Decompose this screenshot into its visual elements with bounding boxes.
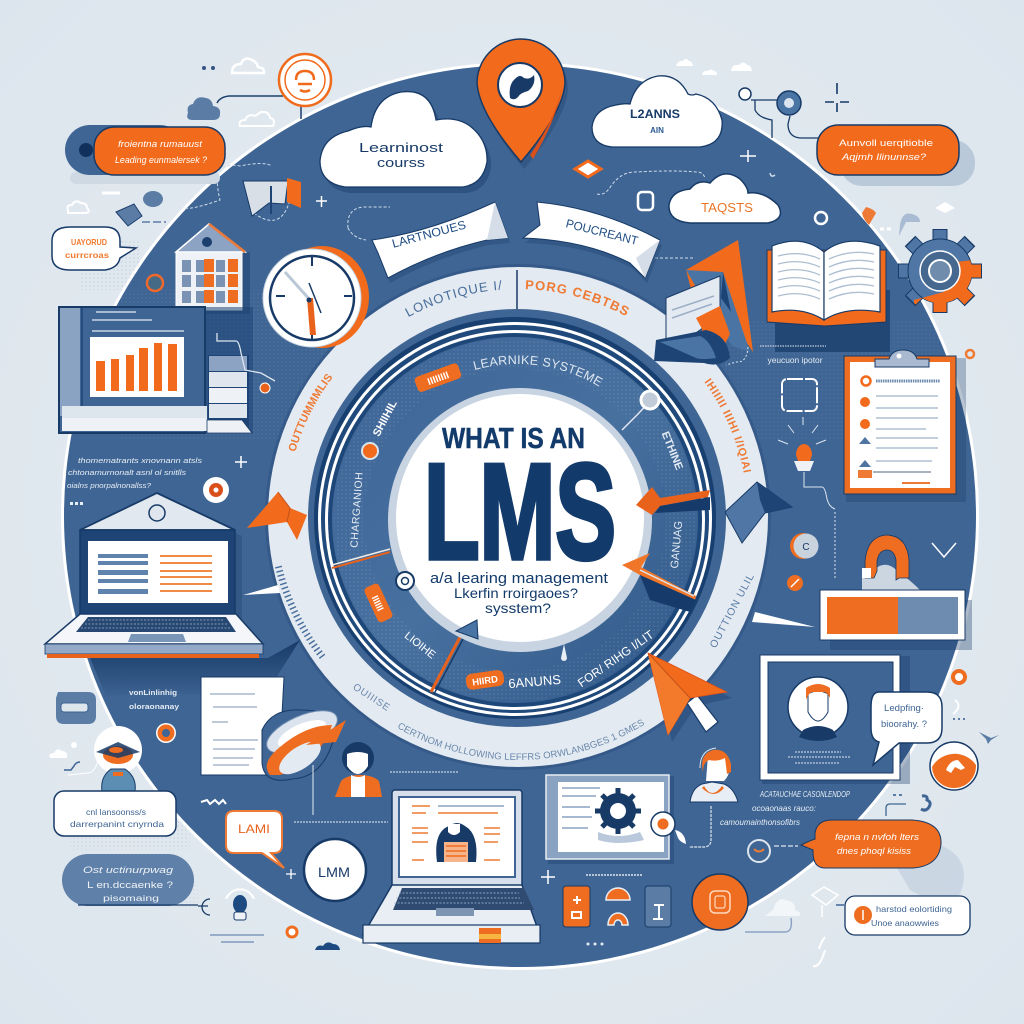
text block: lower-left: oloraonanay [129,702,180,711]
ring label left: CHARGANIOH [348,471,366,548]
icon: chevron [932,543,956,557]
callout: orange top-right: Aqjmh Ilinunnse? [841,152,927,163]
icon row: mobile tiles [563,886,671,927]
panel: analytics monitor [58,307,253,433]
main blue circle [61,62,979,970]
cloud: learning courses: courss [377,156,425,170]
line pointer to bar [752,612,815,627]
ring label right: ETHINE [659,430,685,472]
icon: orange ring dot [362,443,378,459]
callout: LAMI bubble [226,811,284,868]
node on ring [641,391,659,409]
dots [70,502,83,505]
icon: small flag banner [243,178,327,216]
band label left arc: OUTTUMMMLIS [288,374,332,451]
decorative icons top left [187,59,301,126]
subtitle: sysstem? [485,600,551,616]
callout: white left [54,791,190,850]
icon: open book [767,241,890,352]
panel: left laptop [45,493,263,658]
icon: gear [595,788,641,834]
sparkle [235,456,247,468]
text block left middle: chtonamurnonalt asnl ol snitlls [68,468,186,477]
text block: right lower: ACATAUCHAE CASONLENDOP [759,789,850,799]
text block: lower-left: vonLinlinhig [129,688,177,697]
band divider [516,270,518,310]
callout: biography bubble: bioorahy. ? [881,719,927,730]
icon: white cloud small [50,749,67,758]
band label lower-left: OUIIISE [351,682,392,714]
text block: right of scroll: yeucuon ipotor [768,356,823,365]
text block: right lower [720,789,850,827]
icon: person orange [335,742,382,797]
cloud: learning courses [320,92,491,193]
small bottom-right marks [745,887,844,966]
ring label top: LEARNIKE SYSTEME [473,355,603,386]
icon: rounded frame [782,379,817,411]
icon: arrow tile right [725,482,792,543]
icon: learner with hair [436,823,477,862]
icon: small navy cloud [315,942,340,950]
band hatch lower left: IIIIIIIIIIIIIIIIIIIIIIII [275,566,326,659]
ring band [266,264,771,770]
band label top right: PORG CEBTBS [526,280,629,316]
icon: avatar woman [690,748,738,802]
icon: orange gadget circle [930,742,978,790]
segment dividers [332,399,652,694]
icon: orange ring right top [953,671,965,683]
callout: orange bottom-right: dnes phoql kisiss [837,846,911,857]
banner: right ribbon: POUCREANT [564,216,640,248]
callout: orange top-left: froientna rumauust [118,139,203,149]
small target ring [396,572,414,590]
icon: orange diamond [575,161,601,177]
icon: C coin: C [802,542,810,553]
icon: C coin [790,533,818,559]
icon: tape roll [261,702,346,781]
cloud: L2ANNS: AIN [650,126,664,135]
icon: orange ring bottom [287,927,297,937]
panel: document [201,677,284,775]
cloud: learning courses: Learninost [359,141,444,155]
connector to callout [886,804,906,816]
band label right arc: IHIIIII IIIHI I/IQIAI [704,378,752,472]
icon: calendar house [176,224,250,314]
droplet [561,644,567,661]
icon: orange ring left [147,275,163,291]
icon: small ring with smile [748,840,798,862]
ring label right lower: GANUAG [669,520,685,569]
arrow: orange to centre right lower [622,553,696,612]
icon: LMM circle: LMM [318,864,350,880]
cursor tail [687,695,718,732]
icon: orange target [203,477,229,503]
sparkle and dots [541,870,642,884]
sparkle wave [201,800,226,804]
callout: speech bubble curriculum: UAYORUD [71,237,107,247]
icon: orange ring right [966,350,974,358]
orange tag left lower [363,582,394,624]
progress bar [820,590,965,640]
circuit line [217,333,275,381]
callout: orange bottom-right [801,820,964,900]
icon: orange dot near server [260,383,270,393]
callout: orange top-left [65,125,225,184]
icon: LMM circle [304,839,366,901]
orange tag top: IIIIIIII [426,370,451,388]
small decorative objects left [68,191,166,226]
orange tag bottom: HIIRD [472,674,499,689]
icon: chat tile [56,692,96,724]
banner: left ribbon: LARTNOUES [390,218,467,251]
callout: blue pill [62,854,210,915]
callout: LAMI bubble: LAMI [238,822,270,836]
icon: padlock arch progress [820,535,972,650]
band label lower-right: OUTTION ULIL [708,571,757,650]
orange tag left lower: IIIIII [369,594,385,613]
title [424,423,616,616]
panel: clipboard checklist [844,350,966,502]
icon: orange paper plane left [247,492,307,540]
icon: orange target tag [651,812,686,844]
text block: lower-left [129,688,180,711]
callout: biography bubble [871,692,942,765]
icon: clock [263,246,369,348]
icon: graduation scroll stack [654,240,753,365]
title: WHAT IS AN [442,423,585,455]
text block left middle: thomematrants xnovnann atsls [78,456,202,465]
text block left middle [67,456,202,490]
dashed connector lines [185,164,705,258]
panel: center laptop [363,790,540,943]
callout: white bottom-right: Unoe anaowwies [871,918,939,928]
bar chart [90,337,184,397]
callout: orange top-left: Leading eunmalersek ? [115,155,208,166]
inner glow ring [388,388,652,652]
arrow: orange to centre right upper [636,487,710,515]
icon: map pin [477,39,568,169]
ring label lower right: FOR/ RIHG I/LIT [575,627,657,690]
small right decorative icons [740,150,955,236]
small right marks [893,700,999,810]
halftone shadows [120,290,940,440]
icon: lightbulb [778,417,835,578]
callout: white left: darrerpanint cnyrnda [70,819,164,829]
cloud: L2ANNS: L2ANNS [630,109,680,121]
callout: blue pill: Ost uctinurpwag [83,865,173,875]
icon: white pointer left [243,585,280,595]
line from tape roll [312,765,314,815]
callout: biography bubble: Ledpfing· [884,703,924,714]
subtitle: Lkerfin rroirgaoes? [454,585,578,601]
banner: left ribbon [372,202,510,283]
callout: white bottom-right [845,896,970,935]
callout: speech bubble curriculum [52,227,140,290]
navy shade at circle bottom-left [90,640,300,700]
icon: large orange cursor [648,653,732,742]
band label top left: LONOTIQUE I/ [405,280,502,317]
panel: gear screen [546,775,686,864]
cloud: tasks: TAQSTS [701,200,753,215]
subtitle [430,570,609,616]
icon: rounded tag [638,192,653,210]
callout: speech bubble curriculum: currcroas [65,250,109,260]
cloud: tasks [669,174,780,223]
icon: portrait [788,677,848,741]
text block left middle: oialns pnorpalnonallss? [67,481,152,490]
icon: orange badge [692,874,748,930]
orange tag top [414,362,462,393]
callout: blue pill: L en.dccaenke ? [87,880,173,890]
orange tag bottom [465,669,505,690]
callout: white left: cnl lansoonss/s [86,807,146,817]
banner: right ribbon [523,202,662,283]
icon: orange headset badge [279,54,331,106]
LMS title: LMS [424,436,616,588]
arrow: blue to centre bottom [456,620,478,639]
centre dial [308,309,726,727]
dots [586,942,604,946]
sparkle [286,869,296,879]
icon: graduate figure [68,726,142,791]
callout: white bottom-right: harstod eolortiding [876,904,952,914]
subtitle: a/a learing management [430,570,609,587]
laptop base [363,885,540,935]
ring label upper left: SHIIHIL [371,398,400,439]
icon: gear [898,229,982,313]
callout: blue pill: pisomaing [103,894,159,903]
icon: top right circuit nodes [676,59,849,138]
text block: right lower: ocoaonaas rauco: [752,803,817,813]
dashed line [689,806,711,847]
icon: server stack [207,355,252,433]
icon: orange small ring [787,575,803,591]
panel: portrait frame [760,655,910,784]
ring label lower left: LIOIHE [402,630,438,661]
ring label bottom: 6ANUNS [508,672,562,691]
text block: right of scroll [726,346,826,365]
callout: orange bottom-right: fepna n nvfoh lters [835,832,919,843]
band label bottom: CERTNOM HOLLOWING LEFFRS ORWLANBGES 1 GMES [398,720,644,760]
icon: orange target [156,723,176,743]
icon: bulb lower left [210,889,264,942]
text block: right lower: camoumainthonsofibrs [720,817,801,827]
callout: orange top-right: Aunvoll uerqitioble [839,138,933,149]
callout: orange top-right [817,125,975,186]
cloud: L2ANNS [592,76,722,147]
